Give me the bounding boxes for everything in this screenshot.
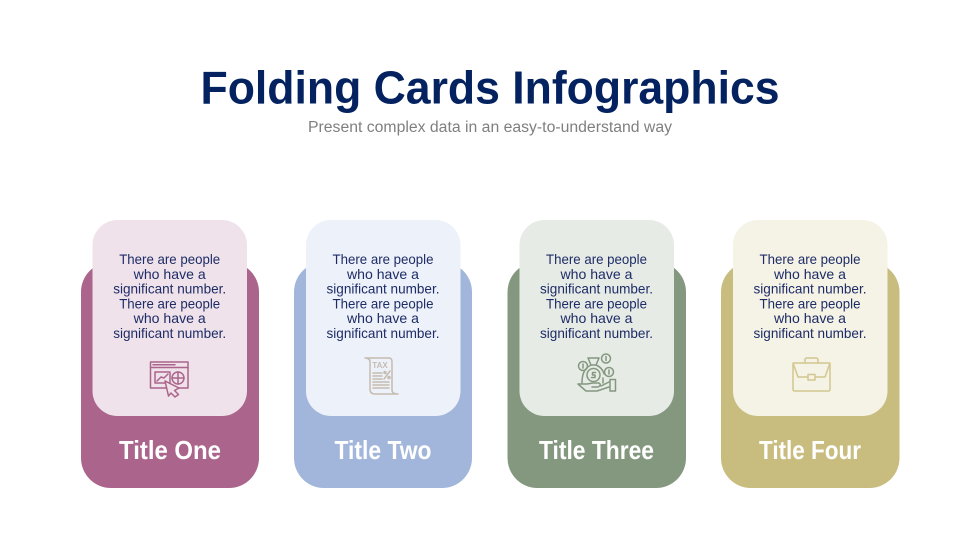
panel: card three [508, 220, 686, 488]
card one text: who have a [133, 310, 206, 326]
card three text: There are people [546, 251, 647, 267]
icon: money bag in hand [578, 354, 616, 391]
icon: briefcase [793, 358, 830, 391]
card two text [326, 251, 440, 341]
card two back panel [294, 262, 472, 488]
card three text: significant number. [540, 325, 653, 341]
card three heading: Title Three [539, 435, 654, 465]
card one text: significant number. [113, 325, 226, 341]
card two text: significant number. [326, 325, 440, 341]
card four front panel [733, 220, 888, 416]
card two text: who have a [346, 310, 419, 326]
icon: tax document [365, 358, 398, 394]
card two front panel [306, 220, 460, 416]
card one text: significant number. [113, 280, 226, 296]
card four text: significant number. [754, 280, 866, 296]
card four text: There are people [760, 251, 861, 267]
card three text: who have a [559, 310, 633, 326]
card one text: who have a [133, 266, 206, 282]
panel: card four [721, 220, 900, 488]
card one text: There are people [119, 251, 220, 267]
card one front panel [92, 220, 247, 416]
subtitle: Present complex data in an easy-to-understand way [308, 119, 672, 136]
card four text: who have a [773, 310, 846, 326]
card three text: significant number. [540, 280, 653, 296]
panel: card two [294, 220, 472, 488]
title: Folding Cards Infographics [200, 62, 780, 114]
card four text: significant number. [754, 325, 866, 341]
card four text: who have a [773, 266, 846, 282]
card one heading: Title One [119, 435, 221, 465]
card four text [754, 251, 866, 341]
panel: card one [81, 220, 259, 488]
card two text: There are people [332, 296, 434, 312]
card two text: who have a [346, 266, 419, 282]
card four heading: Title Four [759, 435, 861, 465]
card one text: There are people [119, 296, 220, 312]
card three front panel [520, 220, 674, 416]
card three text: who have a [559, 266, 633, 282]
card two text: significant number. [326, 280, 440, 296]
icon: tax document: TAX [372, 361, 388, 370]
card three text: There are people [546, 296, 647, 312]
card two heading: Title Two [334, 435, 432, 465]
card three text [540, 251, 653, 341]
card one back panel [81, 262, 259, 488]
card two text: There are people [332, 251, 434, 267]
card four text: There are people [760, 296, 861, 312]
icon: browser with chart and cursor [150, 362, 188, 397]
card four back panel [721, 262, 900, 488]
card one text [113, 251, 226, 341]
card three back panel [508, 262, 686, 488]
